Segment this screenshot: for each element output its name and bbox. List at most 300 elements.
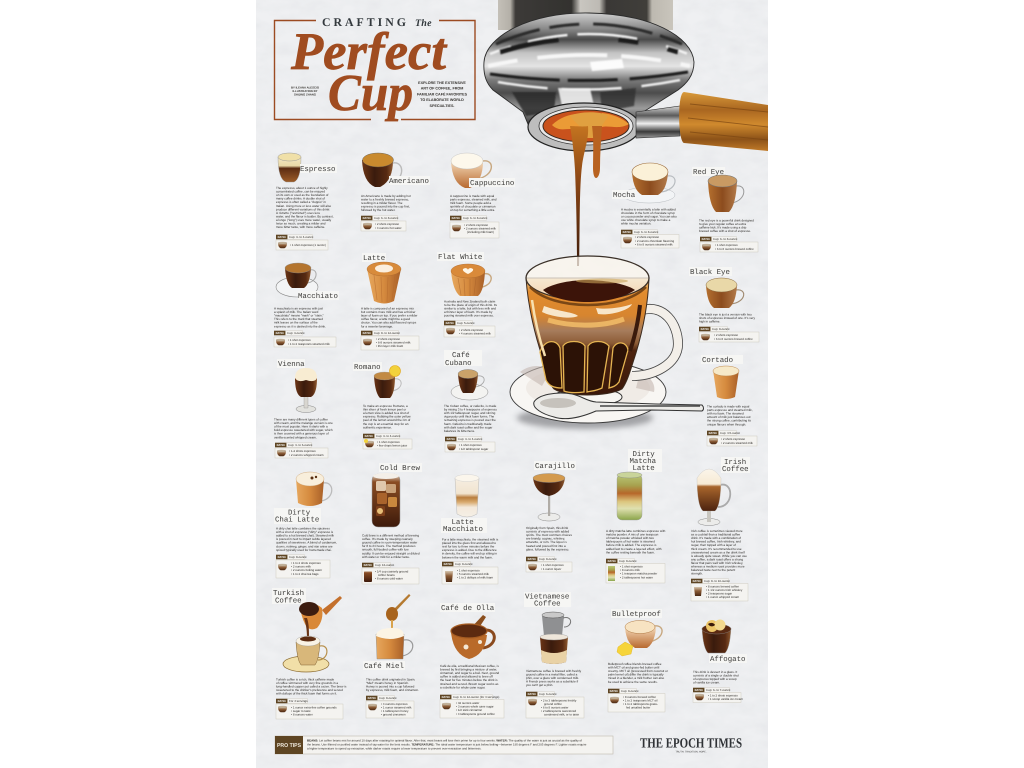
description: This refers to the mark that steamed <box>274 317 323 321</box>
ingredients <box>363 439 412 449</box>
pro tips label <box>275 736 303 754</box>
heading: Black Eye <box>690 268 730 277</box>
ratio: RATIO <box>528 558 536 561</box>
description: milk foam. Some people add a <box>450 201 491 205</box>
description: with dark roast coffee and the sugar <box>444 425 492 429</box>
tagline: TRUTH. TRADITION. HOPE. <box>675 750 707 754</box>
description: with cream, and the melange version is one <box>274 421 333 425</box>
icon: flat white cup <box>451 264 491 296</box>
icon: red eye glass <box>708 175 744 212</box>
description: tablespoons of hot water is steamed <box>606 540 655 544</box>
heading: Irish <box>724 458 746 467</box>
description: between the warm milk and the foam. <box>442 555 493 559</box>
drink: Black Eye <box>689 267 759 342</box>
heading <box>721 457 750 474</box>
title line: Perfect: Perfect <box>290 23 448 81</box>
description: high in caffeine. <box>699 320 720 324</box>
description: shots of espresso instead of one. It's very <box>699 316 755 320</box>
description: long-handled copper pot called a cezve. The brew is <box>276 685 347 689</box>
description: cloves, nutmeg, ginger, and star anise are <box>276 544 333 548</box>
drink: Macchiato <box>274 263 339 347</box>
ingredients: • 2 tablespoons sweetened <box>541 709 577 713</box>
ingredients: • 1 shot espresso <box>457 568 480 572</box>
icon: mocha cup <box>623 163 675 203</box>
ratio <box>691 579 730 583</box>
ingredients: • 4 ounces steamed milk <box>459 331 491 335</box>
ratio: Cup: 8-ounce <box>712 327 730 331</box>
description: spirits. The most common choices <box>526 533 572 537</box>
ingredients <box>361 336 419 350</box>
icon: affogato glass <box>702 620 731 653</box>
ingredients: • 6 to 8 ounces water <box>541 706 569 710</box>
ratio: Cup: 5-ounce <box>457 321 475 325</box>
pro tips text: the beans. Use filtered or purified water instead of tap water for the best results. <box>307 743 411 747</box>
description: This coffee drink originated in Spain. <box>366 678 415 682</box>
ratio: RATIO <box>452 217 460 220</box>
description: A mocha is essentially a latte with added <box>621 208 676 212</box>
title block <box>274 15 475 122</box>
heading: Cappuccino <box>470 179 514 188</box>
ratio <box>276 555 307 559</box>
ratio: Cup: 8- to 12-ounce <box>374 331 400 335</box>
drink: Turkish Coffee <box>272 588 347 719</box>
description: similar to a latte, but with less milk and <box>444 307 496 311</box>
ratio: RATIO <box>363 332 371 335</box>
ingredients: • 4 tablespoons ground coffee <box>456 712 495 716</box>
description: heated and poured first into a <box>526 544 566 548</box>
publisher logo: THE EPOCH TIMES <box>640 736 742 752</box>
ratio: RATIO <box>695 689 703 692</box>
pro tips text: TEMPERATURE: The ideal water temperature is just below boiling—between 195 degrees F and 205 degrees F. Lighter roasts require <box>411 743 586 747</box>
illustration: portafilter <box>484 0 694 151</box>
description: A ristretto ("restricted") uses less <box>276 211 320 215</box>
drink: Dirty Chai Latte <box>274 472 337 578</box>
ingredients <box>440 700 504 718</box>
illustration: wooden handle <box>679 92 768 151</box>
ingredients: • 2 shots espresso <box>376 337 400 341</box>
icon: black eye cup <box>706 278 744 308</box>
ingredients <box>699 332 759 342</box>
title line: Crafting The: The <box>415 18 432 29</box>
description: A cappuccino is made with equal <box>450 194 495 198</box>
ingredients: • 2 to 3 tablespoons freshly <box>541 698 577 702</box>
intro text: ART OF COFFEE, FROM <box>421 87 463 91</box>
ingredients <box>450 222 499 238</box>
description: A French press works as a substitute if <box>526 680 578 684</box>
description: or cocoa powder and sugar. You can also <box>621 215 677 219</box>
intro text: EXPLORE THE EXTENSIVE <box>418 81 466 85</box>
description: vigorously until thick foam forms. The <box>444 415 495 419</box>
ingredients <box>276 560 330 578</box>
ingredients <box>700 242 758 252</box>
ratio <box>361 331 400 335</box>
ratio <box>707 431 740 435</box>
description: The espresso, about 1 ounce of highly <box>276 186 328 190</box>
heading: Café de Olla <box>441 604 495 613</box>
pro tips label: PRO TIPS <box>277 743 301 749</box>
ingredients: • 1 to 2 tablespoons grass- <box>623 702 658 706</box>
description: To make an espresso Romano, a <box>363 404 408 408</box>
ratio: For 4 servings <box>289 699 308 703</box>
description: the coffee resting beneath the foam. <box>606 550 655 554</box>
description: coffee flavor, a latte might be a good <box>361 317 410 321</box>
ingredients: condensed milk, or to taste <box>544 712 579 716</box>
ratio <box>276 699 308 703</box>
ingredients: • 2 shots espresso <box>721 437 745 441</box>
ingredients <box>693 692 743 702</box>
description: peel of the lemon around the rim of <box>363 418 410 422</box>
drink: Romano <box>353 362 412 449</box>
description: concentrated coffee, can be enjoyed <box>276 190 325 194</box>
ratio: Cup: 8-ounce <box>619 559 637 563</box>
description: espresso is poured into the cup first, <box>361 205 410 209</box>
ratio: RATIO <box>709 432 717 435</box>
ingredients: • 1 to 2 chai tea bags <box>291 572 319 576</box>
ratio: RATIO <box>363 217 371 220</box>
ratio <box>444 321 475 325</box>
ratio: RATIO <box>701 328 709 331</box>
ingredients: • 2 teaspoons sugar <box>706 591 732 595</box>
ratio <box>275 443 313 447</box>
ingredients: coffee beans <box>378 573 395 577</box>
byline: BY ILEANA ALESCIO <box>291 86 320 90</box>
description: the cup is an essential step for an <box>363 422 409 426</box>
description: added to a hot brewed chai). Steamed milk <box>276 534 334 538</box>
description: choice. You can also add flavored syrups <box>361 321 417 325</box>
byline: ILLUSTRATION BY <box>293 89 318 93</box>
description: brewed coffee with a shot of espresso. <box>699 229 751 233</box>
title line: Cup: Cup <box>328 65 413 122</box>
ratio: Cup: 3- to 4-ounce <box>458 437 483 441</box>
description: A dirty matcha latte combines espresso with <box>606 529 666 533</box>
illustration: coffee stream <box>570 126 602 266</box>
heading: Macchiato <box>298 292 338 301</box>
description: you can't get a phin. <box>526 683 553 687</box>
heading: Latte <box>452 519 474 527</box>
icon: latte glass <box>367 262 401 304</box>
drink: Americano <box>361 153 430 231</box>
description: parts espresso, steamed milk, and <box>450 198 497 202</box>
ratio: RATIO <box>278 556 286 559</box>
icon: phin filter and glass <box>540 612 571 664</box>
ingredients: • 1 to 2 shots espresso <box>708 694 738 698</box>
ingredients <box>526 697 584 718</box>
drink: Red Eye <box>692 167 758 252</box>
description: caffeine kick. It's made using a drip <box>699 226 747 230</box>
ingredients: • 8 ounces cold water <box>375 577 403 581</box>
ingredients: • 1 ounce liquor <box>541 567 561 571</box>
description: hot brewed coffee, Irish whiskey, and <box>691 540 741 544</box>
description: balanced taste next to the potent <box>691 568 735 572</box>
drink: Latte <box>361 253 419 350</box>
ratio: Cup: 4- to 6-ounce <box>288 443 313 447</box>
description: the heat for five minutes before the drink is <box>440 678 498 682</box>
icon: clay pot <box>451 615 494 659</box>
ingredients: • 1 ounce whipped cream <box>706 595 740 599</box>
description: flavor that pairs well with Irish whiskey, <box>691 561 743 565</box>
description: pouring steamed milk over espresso. <box>444 314 494 318</box>
description: sweetened to the drinker's preference and served <box>276 688 343 692</box>
intro text: TO ELABORATE WORLD <box>420 98 464 102</box>
description: unique flavors when through. <box>707 422 746 426</box>
description: espresso. Rubbing the outer yellow <box>363 415 411 419</box>
ingredients: • 8 ounces water <box>291 713 313 717</box>
ingredients: • 1-2 shots espresso <box>289 449 316 453</box>
description: a lemon slice is added to a shot of <box>363 411 409 415</box>
heading: Latte <box>363 255 385 263</box>
description: the strong coffee, contributing its <box>707 419 751 423</box>
ingredients: • 2 shots espresso <box>714 333 738 337</box>
ingredients: • 32 ounces water <box>456 701 479 705</box>
description: parts espresso and steamed milk, <box>707 408 753 412</box>
heading: Dirty <box>632 450 655 459</box>
description: on top for something a little extra. <box>450 208 495 212</box>
icon: cold brew can glass <box>372 473 400 527</box>
description: The Cuban coffee, or cafecito, is made <box>444 404 497 408</box>
description: placed into the glass first and allowed to <box>442 541 496 545</box>
ingredients <box>621 234 679 248</box>
heading: Vietnamese <box>525 592 569 602</box>
description: matcha powder. A mix of one teaspoon <box>606 533 659 537</box>
description: of coffee simmered with very fine grounds in a <box>276 681 338 685</box>
ingredients: • 1 ounce extra-fine coffee grounds <box>291 706 337 710</box>
pro tips panel <box>275 736 613 754</box>
icon: cortado glass <box>713 366 739 399</box>
heading: Bulletproof <box>612 610 661 619</box>
ratio: Cup: 3- to 4-ounce <box>289 235 314 239</box>
drink: Bulletproof <box>608 609 668 712</box>
ratio <box>361 216 399 220</box>
ratio: RATIO <box>528 693 536 696</box>
heading <box>524 592 571 608</box>
heading: Café Miel <box>364 662 404 671</box>
heading: Affogato <box>710 655 745 664</box>
ingredients <box>274 337 336 347</box>
ratio <box>362 563 395 567</box>
ratio: RATIO <box>278 700 286 703</box>
ingredients: • 2 shots espresso <box>375 222 399 226</box>
description: Turkish coffee is a rich, thick caffeine made <box>276 678 335 682</box>
ingredients: • few drops lemon juice <box>377 444 408 448</box>
description: An Americano is made by adding hot <box>361 194 411 198</box>
ratio <box>363 434 401 438</box>
description: A macchiato is an espresso with just <box>274 306 323 310</box>
ingredients: • 2 ounces boiling water <box>291 568 322 572</box>
heading: Coffee <box>722 465 749 474</box>
illustration: hero spoon <box>534 393 704 419</box>
ingredients: • 1 1/2 ounces Irish whiskey <box>706 588 743 592</box>
ratio: RATIO <box>702 238 710 241</box>
description: produce different variations of this drink: <box>276 207 330 211</box>
ratio: Cup: 8-ounce <box>455 562 473 566</box>
description: with water or milk for a milder taste. <box>362 555 410 559</box>
icon: carajillo glass <box>533 474 565 521</box>
heading: Latte <box>632 465 655 473</box>
description: a substitute for whole cane sugar. <box>440 685 486 689</box>
ratio <box>274 331 305 335</box>
description: before milk is added. The espresso is <box>606 543 657 547</box>
description: but contains more milk and has a thicker <box>361 310 416 314</box>
ratio: RATIO <box>277 444 285 447</box>
description: coffee is added and allowed to brew off <box>440 675 493 679</box>
description: ground coffee in a metal filter, called a <box>526 673 578 677</box>
ingredients: • 1/2 stick cinnamon <box>456 708 483 712</box>
heading: Espresso <box>300 166 335 174</box>
description: Irish coffee is sometimes viewed more <box>691 529 743 533</box>
ratio <box>445 437 483 441</box>
ratio <box>450 216 488 220</box>
icon: cappuccino cup <box>451 153 491 188</box>
drink: Dirty Matcha Latte <box>606 449 666 583</box>
description: balances its bitterness. <box>444 429 475 433</box>
ingredients <box>361 221 406 231</box>
ingredients: • 4 ounces espresso <box>381 702 408 706</box>
ratio: RATIO <box>446 322 454 325</box>
ratio: RATIO <box>444 563 452 566</box>
description: with 1/2 tablespoon sugar, and stirring <box>444 411 496 415</box>
heading: Turkish <box>273 589 304 598</box>
drink: Vienna <box>274 359 333 458</box>
ingredients: • 1 shot espresso <box>459 443 482 447</box>
ratio: RATIO <box>276 332 284 335</box>
icon: macchiato cup <box>276 263 318 297</box>
ratio <box>442 562 473 566</box>
icon: americano cup <box>362 153 402 187</box>
ratio <box>606 559 637 563</box>
ingredients: • 1 scoop vanilla ice cream <box>708 697 743 701</box>
description: a thinner layer of foam. It's made by <box>444 310 493 314</box>
ratio: Cup: 6- to 8-ounce <box>713 237 738 241</box>
ingredients: • 2 shots espresso <box>464 223 488 227</box>
description: The black eye is just a version with two <box>699 312 752 316</box>
description: consists of espresso with added <box>526 530 569 534</box>
description: strained and served. Brown sugar works as <box>440 682 499 686</box>
ratio: Cup: 6-ounce <box>539 692 557 696</box>
ingredients <box>691 584 748 601</box>
description: to give your regular coffee an extra <box>699 222 746 226</box>
drink: Vietnamese Coffee <box>524 592 584 718</box>
ratio: Cup: 6- to 8-ounce <box>634 230 659 234</box>
ingredients <box>444 326 495 337</box>
description: many coffee drinks. A double shot of <box>276 197 325 201</box>
ratio <box>276 235 314 239</box>
heading: Red Eye <box>693 168 724 177</box>
description: Bulletproof coffee blends brewed coffee <box>608 662 662 666</box>
description: glass, followed by the espresso. <box>526 547 569 551</box>
description: is already quite sweet. While you can use <box>691 554 747 558</box>
ingredients: • 2 ounces steamed milk <box>721 441 753 445</box>
description: There are many different types of coffee <box>274 418 328 422</box>
description: A dirty chai latte combines the spiciness <box>276 526 330 530</box>
ingredients: • 5 ounces steamed milk <box>457 572 489 576</box>
drink: Carajillo <box>526 461 576 572</box>
description: Originally from Spain, this drink <box>526 526 569 530</box>
ingredients: • 6 to 8 ounces steamed milk <box>635 242 673 246</box>
heading: Coffee <box>534 600 561 608</box>
description: Cold brew is a different method of brewing <box>362 534 419 538</box>
ratio <box>693 688 731 692</box>
ratio <box>366 696 397 700</box>
poster background <box>256 0 768 768</box>
description: This drink is dessert in a glass. It <box>693 670 737 674</box>
ingredients: • 1 shot espresso <box>715 243 738 247</box>
ingredients: • 6 to 8 ounces brewed coffee <box>714 337 753 341</box>
ratio: Cup: 8-ounce <box>379 696 397 700</box>
ratio: Cup: 6- to 8-ounce <box>374 216 399 220</box>
heading: Mocha <box>613 191 636 200</box>
byline: SHIJING ZHANG <box>294 92 316 96</box>
description: is then crowned with a generous layer of <box>274 432 329 436</box>
ratio: Cup: 8-ounce <box>621 689 639 693</box>
title line: Crafting The: CRAFTING <box>322 15 409 29</box>
description: Café de olla, a traditional Mexican coffee, is <box>440 664 499 668</box>
ratio: Cup: 3- to 4-ounce <box>376 434 401 438</box>
description: of matcha powder whisked with two <box>606 536 654 540</box>
description: amaretto, or rum. The liquor is <box>526 540 567 544</box>
ingredients: • 1 teaspoon matcha powder <box>620 572 657 576</box>
drink: Affogato <box>693 620 747 702</box>
description: twice as much, creating a milder and <box>276 222 326 226</box>
heading <box>272 588 306 606</box>
ratio: RATIO <box>364 564 372 567</box>
heading <box>274 508 321 524</box>
ingredients: fed unsalted butter <box>626 706 650 710</box>
icon: bulletproof cup with butter <box>617 620 662 656</box>
description: followed by the hot water. <box>361 208 396 212</box>
description: any coffee, a dark roast offers a strong <box>691 557 743 561</box>
ingredients <box>445 442 495 452</box>
description: for a sweeter beverage. <box>361 324 393 328</box>
ratio: RATIO <box>608 560 616 563</box>
ingredients <box>275 448 328 458</box>
ingredients <box>707 436 757 446</box>
icon: honey dipper and mug <box>376 594 413 659</box>
description: cinnamon, and sugar to a boil. Next, ground <box>440 671 499 675</box>
heading: Chai Latte <box>275 516 319 524</box>
ingredients: • 1 to 2 teaspoons steamed milk <box>288 342 330 346</box>
description: coffee. It's made by steeping coarsely <box>362 537 413 541</box>
description: espresso is added. Due to the difference <box>442 548 497 552</box>
description: thick cream. It's recommended to use <box>691 547 742 551</box>
icon: espresso cup <box>278 153 301 182</box>
description: acidity. It can be enjoyed straight or diluted <box>362 551 420 555</box>
description: of espresso topped with a scoop <box>693 677 737 681</box>
ratio <box>700 237 738 241</box>
drink: Espresso <box>276 153 337 250</box>
description: sugar, then topped with a layer of <box>691 543 736 547</box>
description: qualities of sweetness. A blend of cardamom, <box>276 541 337 545</box>
intro text: SPECIALTIES. <box>430 104 454 108</box>
ingredients: • 1 shot espresso <box>288 338 311 342</box>
description: authentic experience. <box>363 425 392 429</box>
description: A latte is composed of an espresso mix <box>361 306 414 310</box>
icon: romano cup with lemon <box>374 366 401 398</box>
description: by espresso, milk foam, and cinnamon. <box>366 688 419 692</box>
drink: Café Cubano <box>444 350 497 452</box>
ingredients: • 8 ounces milk <box>620 568 640 572</box>
ratio <box>526 692 557 696</box>
heading: Cold Brew <box>380 464 420 473</box>
description: with no foam. The steamed <box>707 412 744 416</box>
ratio: Cup: 6- to 8-ounce <box>463 216 488 220</box>
ingredients: • 2 ounces whipped cream <box>289 453 324 457</box>
heading: Coffee <box>275 596 302 606</box>
description: as a cocktail than a traditional coffee <box>691 533 741 537</box>
ingredients: • 1 shot espresso <box>620 564 643 568</box>
description: use white chocolate syrup to make a <box>621 218 671 222</box>
description: creamy. MCT oil (processed from coconut or <box>608 669 668 673</box>
ingredients <box>276 704 343 719</box>
